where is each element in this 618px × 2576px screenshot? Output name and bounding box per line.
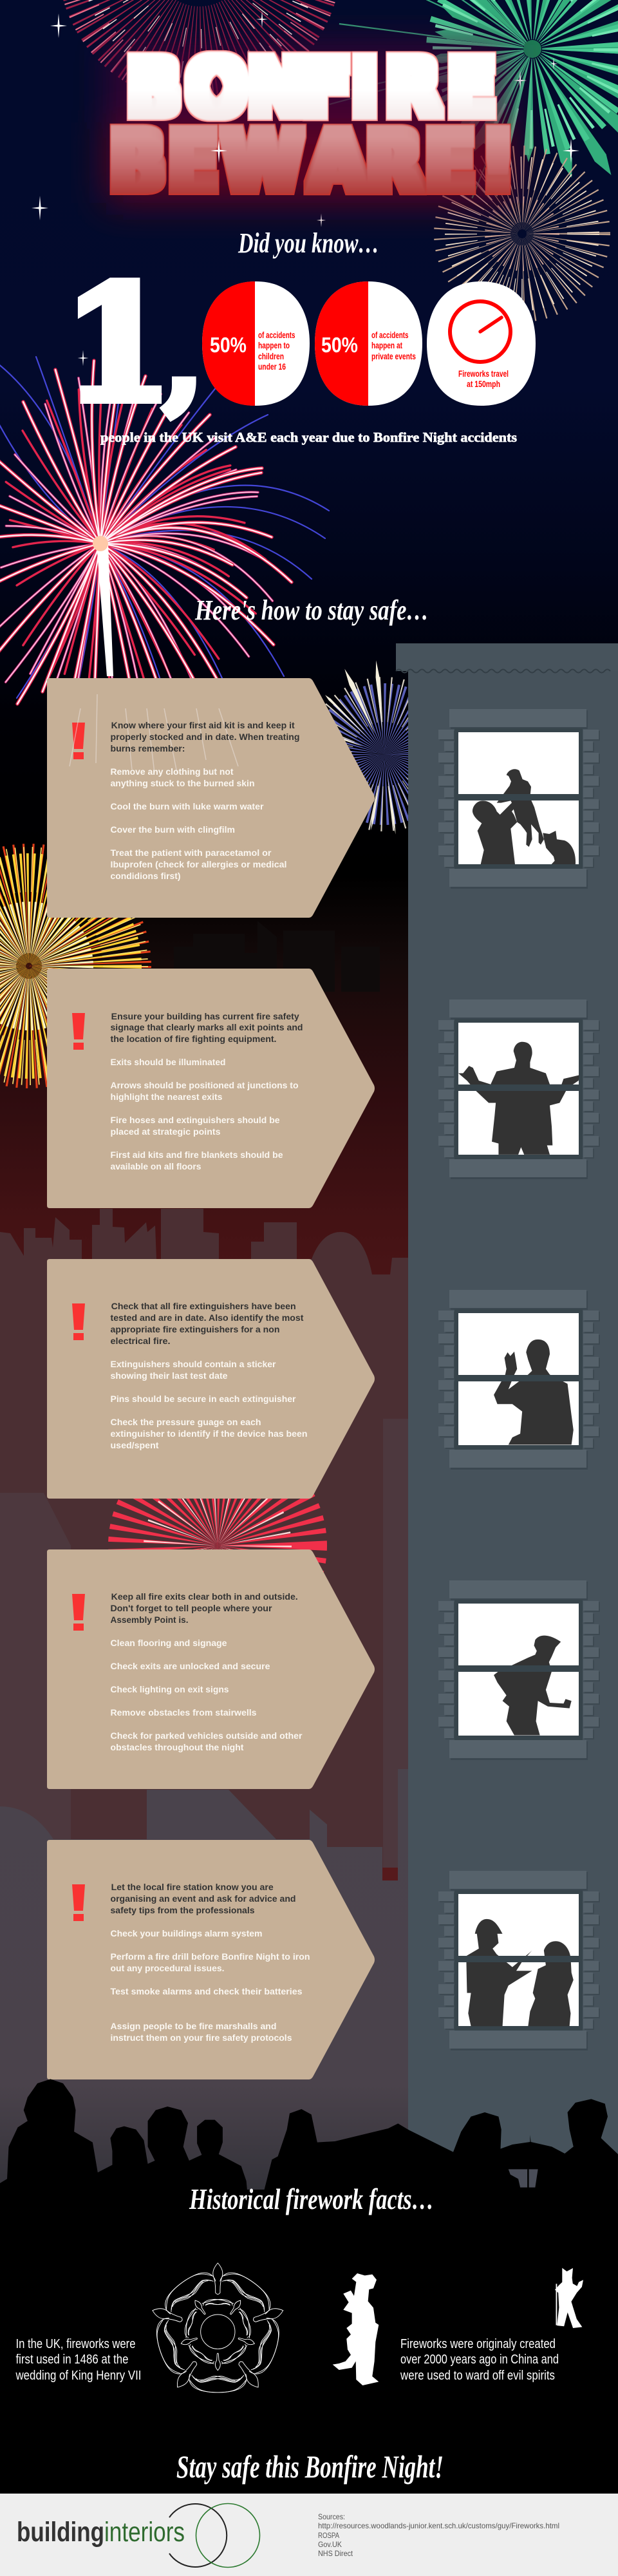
- firework: bronze burst: [461, 173, 583, 295]
- stat oval: children under 16: happen to: [258, 340, 290, 350]
- fact text: evil spirits: [400, 2337, 559, 2383]
- panel 4: fire exits: Remove obstacles from stairwells: [111, 1707, 257, 1718]
- window 2: man shrugging: [438, 999, 600, 1179]
- panel 3: extinguishers: used/spent: [111, 1440, 159, 1450]
- panel 5: fire station: Perform a fire drill before Bonfire Night to iron: [111, 1951, 310, 1962]
- icon: devil child: [556, 2269, 583, 2327]
- panel 4: fire exits: Check for parked vehicles outside and other: [111, 1730, 303, 1741]
- panel 3: extinguishers: Pins should be secure in each extinguisher: [111, 1394, 296, 1404]
- window 4: man running: [438, 1580, 600, 1760]
- panel 4: fire exits: [47, 1549, 375, 1789]
- panel 5: fire station: organising an event and ask for advice and: [111, 1893, 296, 1904]
- panel 5: fire station: out any procedural issues.: [111, 1963, 224, 1973]
- panel 4: fire exits: Keep all fire exits clear both in and outside.: [111, 1591, 298, 1602]
- panel 2: signage: Fire hoses and extinguishers should be: [111, 1115, 280, 1125]
- panel 2: signage: placed at strategic points: [111, 1126, 221, 1137]
- panel 2: signage: signage that clearly marks all exit points and: [111, 1022, 303, 1032]
- window 1: parent lifting child and cat: [438, 709, 600, 889]
- skyline: faint far layer: [174, 921, 380, 992]
- heading: how to stay safe: Here's how to stay safe…: [194, 594, 429, 626]
- stat oval: children under 16: under 16: [258, 361, 286, 372]
- panel 4: fire exits: Clean flooring and signage: [111, 1638, 227, 1648]
- big stat: 1,: 1: [63, 251, 173, 437]
- stat caption: people in the UK visit A&E each year due to Bonfire Night accidents: [100, 430, 517, 445]
- stat oval: speed gauge: Fireworks travel: [458, 368, 509, 379]
- title: Beware!: BEWARE!: [109, 115, 514, 207]
- panel 1: first aid: Know where your first aid kit is and keep it: [111, 720, 295, 730]
- fact text: King Henry VII: first used in 1486 at the: [15, 2353, 129, 2367]
- heading: did you know: Did you know…: [238, 227, 379, 259]
- stat oval: children under 16: [202, 281, 310, 406]
- panel 5: fire station: Test smoke alarms and check their batteries: [111, 1986, 303, 1996]
- panel 2: signage: highlight the nearest exits: [111, 1092, 223, 1102]
- firework: red burst top: [74, 0, 325, 87]
- building wall: [396, 643, 618, 2191]
- sources: http://resources.woodlands-junior.kent.sch.uk/customs/guy/Fireworks.html: [318, 2521, 559, 2530]
- fact text: evil spirits: were used to ward off evil spirits: [400, 2369, 555, 2383]
- crowd silhouette: [0, 2079, 618, 2499]
- panel 5: fire station: [47, 1840, 375, 2079]
- panel 1: first aid: Ibuprofen (check for allergies or medical: [111, 859, 287, 869]
- sources: ROSPA: [318, 2531, 339, 2540]
- logo: building interiors: [17, 2504, 260, 2567]
- footer bar: [0, 2494, 618, 2576]
- panel 4: fire exits: Check exits are unlocked and secure: [111, 1661, 270, 1671]
- panel 2: signage: First aid kits and fire blankets should be: [111, 1150, 283, 1160]
- stat oval: private events: 50%: [321, 333, 358, 357]
- panel 2: signage: Exits should be illuminated: [111, 1057, 225, 1067]
- closing message: Stay safe this Bonfire Night!: [176, 2448, 444, 2485]
- panel 2: signage: Arrows should be positioned at junctions to: [111, 1080, 299, 1090]
- skyline: lower grey layer: [0, 1769, 408, 2190]
- big stat: 1,: ,: [164, 296, 202, 424]
- panel 4: fire exits: obstacles throughout the night: [111, 1742, 244, 1752]
- panel 1: first aid: Treat the patient with paracetamol or: [111, 848, 272, 858]
- fact text: evil spirits: over 2000 years ago in China and: [400, 2353, 559, 2367]
- fact text: King Henry VII: wedding of King Henry VII: [15, 2369, 142, 2383]
- panel 5: fire station: safety tips from the professionals: [111, 1905, 255, 1915]
- skyline: tall building right: [0, 1419, 408, 1868]
- panel 2: signage: available on all floors: [111, 1161, 201, 1171]
- panel 1: first aid: Cover the burn with clingfilm: [111, 824, 235, 835]
- icon: tudor rose: [135, 2260, 301, 2418]
- fact text: King Henry VII: [15, 2337, 142, 2383]
- panel 1: first aid: anything stuck to the burned skin: [111, 778, 255, 788]
- skyline: middle layer: [0, 1209, 408, 1868]
- panel 3: extinguishers: showing their last test date: [111, 1370, 228, 1381]
- sources: Sources:: [318, 2512, 345, 2521]
- stat oval: private events: private events: [371, 351, 416, 361]
- stat oval: children under 16: of accidents: [258, 330, 295, 340]
- firework: red burst mid page: [163, 1491, 272, 1600]
- fact text: evil spirits: Fireworks were originaly created: [400, 2337, 556, 2351]
- panel 1: first aid: Cool the burn with luke warm water: [111, 801, 264, 811]
- stat oval: private events: [315, 281, 422, 406]
- panel 1: first aid: burns remember:: [111, 743, 185, 753]
- sparkle stars: [32, 11, 579, 366]
- firework: big pink and blue burst: [0, 350, 329, 756]
- fact text: King Henry VII: In the UK, fireworks were: [15, 2337, 135, 2351]
- stat oval: children under 16: 50%: [210, 333, 247, 357]
- icon: dragon costume child: [333, 2273, 379, 2385]
- firework: green burst top right: [326, 0, 618, 198]
- window 3: builder ok sign: [438, 1290, 600, 1470]
- title: Bonfire: BONFIRE: [127, 43, 496, 133]
- panel 1: first aid: Remove any clothing but not: [111, 766, 234, 777]
- stat oval: speed gauge: at 150mph: [467, 379, 500, 389]
- firework: yellow burst: [0, 869, 126, 1063]
- panel 4: fire exits: Assembly Point is.: [111, 1615, 188, 1625]
- panel 3: extinguishers: Check the pressure guage on each: [111, 1417, 261, 1427]
- sources: Gov.UK: [318, 2540, 342, 2549]
- panel 1: first aid: properly stocked and in date. When treating: [111, 732, 300, 742]
- panel 3: extinguishers: Check that all fire extinguishers have been: [111, 1301, 296, 1311]
- panel 5: fire station: Let the local fire station know you are: [111, 1882, 274, 1892]
- panel 4: fire exits: Don't forget to tell people where your: [111, 1603, 272, 1613]
- panel 2: signage: the location of fire fighting equipment.: [111, 1034, 277, 1044]
- panel 2: signage: [47, 969, 375, 1208]
- panel 1: first aid: condidions first): [111, 871, 180, 881]
- panel 5: fire station: Assign people to be fire marshalls and: [111, 2021, 277, 2031]
- panel 3: extinguishers: appropriate fire extinguishers for a non: [111, 1324, 279, 1334]
- sparkle over title: [211, 138, 227, 163]
- panel 4: fire exits: Check lighting on exit signs: [111, 1684, 229, 1694]
- stat oval: private events: of accidents: [371, 330, 409, 340]
- heading: historical facts: Historical firework facts…: [189, 2183, 434, 2215]
- window 5: fire officer and woman: [438, 1871, 600, 2050]
- panel 3: extinguishers: electrical fire.: [111, 1336, 170, 1346]
- stat oval: private events: happen at: [371, 340, 402, 350]
- panel 3: extinguishers: Extinguishers should contain a sticker: [111, 1359, 276, 1369]
- panel 2: signage: Ensure your building has current fire safety: [111, 1011, 299, 1021]
- sources: [318, 2512, 559, 2558]
- logo: building interiors: interiors: [104, 2517, 185, 2548]
- stat oval: children under 16: children: [258, 351, 284, 361]
- panel 3: extinguishers: tested and are in date. Also identify the most: [111, 1312, 304, 1323]
- panel 3: extinguishers: extinguisher to identify if the device has been: [111, 1428, 308, 1439]
- panel 3: extinguishers: [47, 1259, 375, 1499]
- stat oval: speed gauge: [427, 281, 536, 406]
- panel 5: fire station: Check your buildings alarm system: [111, 1928, 263, 1938]
- logo: building interiors: building: [17, 2517, 104, 2548]
- title glow: [106, 45, 512, 203]
- sources: NHS Direct: [318, 2549, 353, 2558]
- panel 5: fire station: instruct them on your fire safety protocols: [111, 2032, 292, 2043]
- firework: blue and white burst: [305, 660, 439, 835]
- panel 1: first aid: [47, 678, 375, 918]
